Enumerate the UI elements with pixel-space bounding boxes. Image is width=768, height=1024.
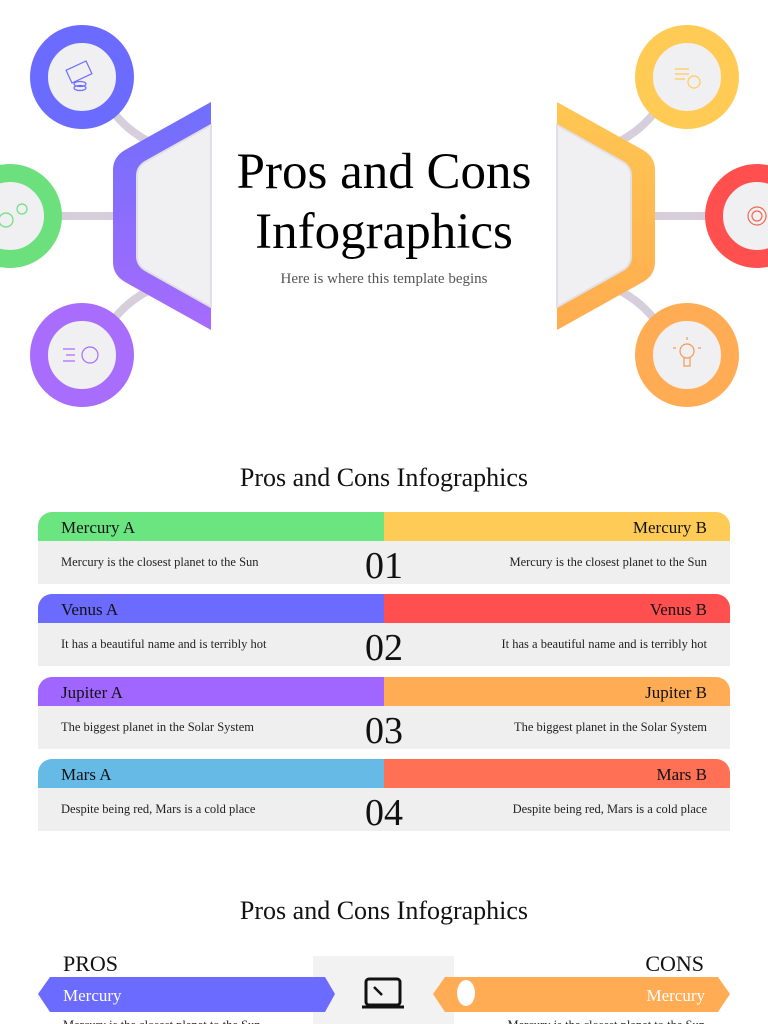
section heading 2: Pros and Cons Infographics — [240, 463, 528, 492]
title: Pros and Cons — [237, 144, 531, 200]
comparison table: Venus A — [61, 600, 118, 619]
comparison table: It has a beautiful name and is terribly hot — [61, 637, 266, 651]
section heading 3: Pros and Cons Infographics — [240, 896, 528, 925]
comparison table: 02 — [365, 627, 403, 669]
title — [237, 144, 531, 260]
comparison table: The biggest planet in the Solar System — [514, 720, 707, 734]
title: Infographics — [255, 204, 513, 260]
cons label: CONS — [645, 951, 704, 976]
comparison table: It has a beautiful name and is terribly hot — [502, 637, 707, 651]
comparison table: Despite being red, Mars is a cold place — [61, 802, 255, 816]
left hexagon — [113, 102, 211, 330]
comparison table: Despite being red, Mars is a cold place — [513, 802, 707, 816]
comparison table: 01 — [365, 545, 403, 587]
comparison table: Jupiter B — [645, 683, 707, 702]
top graphic — [0, 25, 768, 407]
right hexagon — [557, 102, 655, 330]
connectors — [60, 105, 710, 327]
comparison table: Mercury is the closest planet to the Sun — [509, 555, 707, 569]
banners — [38, 977, 730, 1024]
banners: Mercury — [646, 986, 705, 1005]
banners: Mercury — [63, 986, 122, 1005]
comparison table: The biggest planet in the Solar System — [61, 720, 254, 734]
comparison table: Mars A — [61, 765, 112, 784]
comparison table: 03 — [365, 710, 403, 752]
pros label: PROS — [63, 951, 118, 976]
comparison table: Venus B — [650, 600, 707, 619]
comparison table — [38, 512, 730, 834]
comparison table: 04 — [365, 792, 403, 834]
comparison table: Jupiter A — [61, 683, 123, 702]
comparison table: Mars B — [656, 765, 707, 784]
comparison table: Mercury B — [633, 518, 707, 537]
comparison table: Mercury is the closest planet to the Sun — [61, 555, 259, 569]
small icons — [0, 61, 766, 366]
icon circles — [0, 34, 768, 398]
center gray box — [313, 956, 454, 1024]
subtitle: Here is where this template begins — [280, 271, 488, 287]
comparison table: Mercury A — [61, 518, 135, 537]
